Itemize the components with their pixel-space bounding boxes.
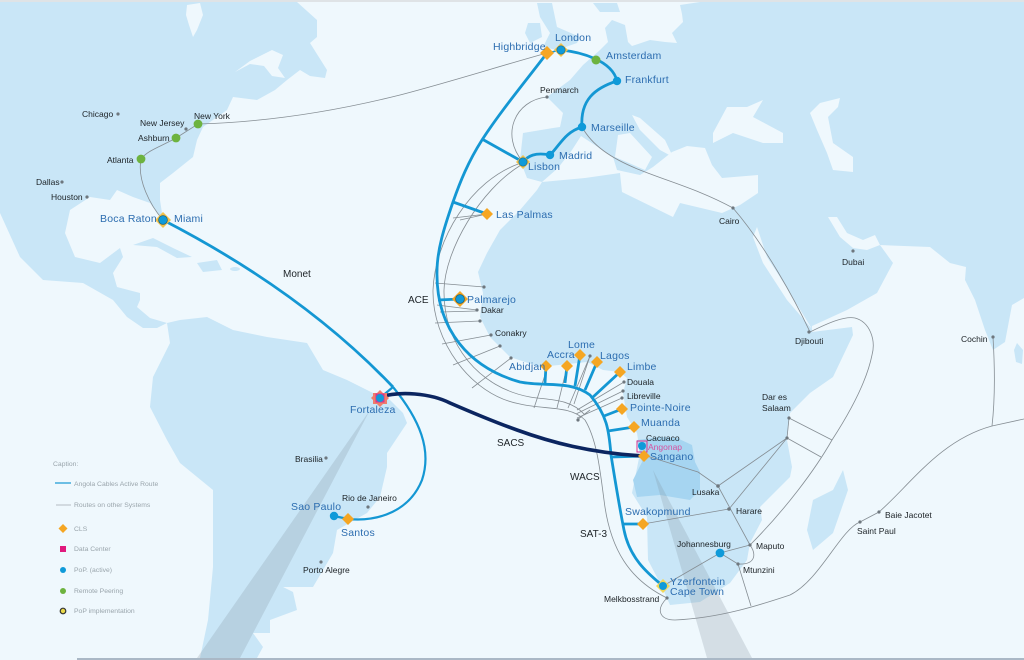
water: Red Sea [753, 227, 812, 329]
node: Johannesburg [677, 539, 731, 557]
land: Hispaniola [197, 260, 222, 272]
node: Atlanta [107, 155, 145, 165]
node: Frankfurt: Frankfurt [625, 74, 669, 86]
node: Yzerfontein and Cape Town: Cape Town [670, 586, 724, 598]
legend [53, 461, 158, 615]
node: Saint Paul: Saint Paul [857, 526, 896, 536]
node: Fortaleza [350, 390, 396, 416]
node: Palmarejo: Palmarejo [467, 294, 516, 306]
land: Scandinavia tip [593, 3, 620, 12]
node: Saint Paul [857, 520, 896, 536]
cable label: SACS: SACS [497, 438, 525, 449]
node: Santos [341, 513, 375, 539]
node: New York: New York [194, 111, 231, 121]
node: Muanda [628, 417, 680, 433]
node: Lome: Lome [568, 339, 595, 351]
legend title: Caption: [53, 461, 78, 468]
node: London: London [555, 32, 591, 44]
node: Chicago: Chicago [82, 109, 113, 119]
node: Maputo: Maputo [756, 541, 785, 551]
node: New York [194, 111, 231, 128]
node: Penmarch: Penmarch [540, 85, 579, 95]
legend: data center: Data Center [74, 546, 111, 553]
water: Mediterranean Sea [542, 136, 758, 217]
land: Ireland [525, 23, 542, 43]
node: Cacuaco and Angonap data center [637, 433, 682, 452]
projection wedge: Fortaleza [197, 410, 370, 658]
cable label: SAT-3: SAT-3 [580, 529, 607, 540]
node: Lisbon: Lisbon [528, 161, 560, 173]
routes on other systems [140, 53, 1024, 620]
node: Boca Raton and Miami [100, 212, 203, 228]
legend: remote peering: Remote Peering [74, 588, 123, 595]
land: Sri Lanka [1014, 343, 1023, 364]
node: Limbe [614, 361, 657, 378]
node: Amsterdam [592, 50, 662, 64]
node: Dubai [842, 249, 864, 267]
node: Madrid: Madrid [559, 150, 592, 162]
land: Puerto Rico [230, 267, 240, 271]
node: Boca Raton and Miami: Miami [174, 213, 203, 225]
land: South America [150, 317, 407, 658]
node: Mtunzini [736, 562, 775, 575]
node: Muanda: Muanda [641, 417, 680, 429]
legend: active route: Angola Cables Active Route [74, 481, 158, 488]
water: Hudson Bay [186, 3, 203, 37]
legend: other systems: Routes on other Systems [74, 502, 151, 509]
land: Cuba [133, 238, 192, 258]
node: Conakry: Conakry [495, 328, 527, 338]
node: Highbridge [493, 41, 554, 60]
land: Europe, Asia and Africa [478, 0, 1024, 605]
water: Gulf of Saint Lawrence [235, 50, 285, 78]
node: Cairo: Cairo [719, 216, 740, 226]
cable label: Monet: Monet [283, 269, 311, 280]
node: Highbridge: Highbridge [493, 41, 546, 53]
node: Santos: Santos [341, 527, 375, 539]
node: Dakar: Dakar [481, 305, 504, 315]
node: Accra: Accra [547, 349, 575, 361]
node: Dar es Salaam [762, 392, 791, 440]
node: Palmarejo [452, 291, 516, 307]
node: Marseille: Marseille [591, 122, 635, 134]
node: Sangano: Sangano [650, 451, 693, 463]
node: Dubai: Dubai [842, 257, 864, 267]
land: Great Britain [537, 3, 580, 50]
node: New Jersey: New Jersey [140, 118, 185, 128]
node: Johannesburg: Johannesburg [677, 539, 731, 549]
land: Angola highlight [633, 437, 700, 500]
water: Black Sea [713, 100, 783, 143]
node: Porto Alegre [303, 560, 350, 575]
cable label: ACE: ACE [408, 295, 429, 306]
node: Mtunzini: Mtunzini [743, 565, 775, 575]
node: Yzerfontein and Cape Town [656, 576, 725, 598]
land: Madagascar [807, 470, 848, 550]
water: Tyrrhenian Sea [615, 133, 652, 170]
node: Melkbosstrand: Melkbosstrand [604, 594, 660, 604]
water: Adriatic Sea [632, 115, 673, 157]
node: Cacuaco and Angonap data center: Angonap [648, 442, 682, 452]
SACS route [380, 394, 644, 456]
legend: CLS: CLS [74, 526, 88, 533]
node: Limbe: Limbe [627, 361, 657, 373]
node: West Africa unlabeled points [478, 285, 625, 422]
node: Cacuaco and Angonap data center: Cacuaco [646, 433, 680, 443]
node: Douala: Douala [627, 377, 654, 387]
node: Libreville: Libreville [627, 391, 661, 401]
node: Dar es Salaam: Salaam [762, 403, 791, 413]
node: Dallas: Dallas [36, 177, 60, 187]
node: Brasilia: Brasilia [295, 454, 323, 464]
node: Cairo [719, 206, 740, 226]
node: Houston: Houston [51, 192, 83, 202]
node: Fortaleza: Fortaleza [350, 404, 396, 416]
node: Porto Alegre: Porto Alegre [303, 565, 350, 575]
legend: PoP active: PoP. (active) [74, 567, 112, 574]
node: Lisbon [516, 155, 560, 173]
node: Yzerfontein and Cape Town: Yzerfontein [670, 576, 725, 588]
node: Pointe-Noire: Pointe-Noire [630, 402, 691, 414]
node: Lusaka: Lusaka [692, 487, 720, 497]
node: Harare: Harare [736, 506, 762, 516]
node: Amsterdam: Amsterdam [606, 50, 662, 62]
node: Lome [568, 339, 595, 361]
node: Djibouti [795, 330, 823, 346]
node: Sao Paulo: Sao Paulo [291, 501, 341, 513]
node: Djibouti: Djibouti [795, 336, 823, 346]
node: Swakopmund [625, 506, 691, 530]
active routes: Angola Cables [163, 50, 663, 586]
node: Boca Raton and Miami: Boca Raton [100, 213, 157, 225]
node: Baie Jacotet: Baie Jacotet [885, 510, 932, 520]
projection wedge: Sangano [653, 470, 752, 658]
node: Atlanta: Atlanta [107, 155, 134, 165]
cable label: WACS: WACS [570, 472, 600, 483]
legend: PoP implementation: PoP implementation [74, 608, 135, 615]
node: Ashburn: Ashburn [138, 133, 170, 143]
node: Las Palmas: Las Palmas [496, 209, 553, 221]
node: Accra [547, 349, 575, 372]
node: London [554, 32, 591, 57]
node: Swakopmund: Swakopmund [625, 506, 691, 518]
node: Sao Paulo [291, 501, 341, 520]
land: North and Central America [0, 0, 327, 328]
water: Caspian Sea [810, 98, 853, 172]
node: Cochin: Cochin [961, 334, 988, 344]
water: Persian Gulf [828, 217, 880, 250]
node: Rio de Janeiro [342, 493, 397, 509]
legend: CLS [58, 524, 88, 533]
node: Rio de Janeiro: Rio de Janeiro [342, 493, 397, 503]
node: Lagos: Lagos [600, 350, 630, 362]
node: Lagos [591, 350, 630, 368]
node: Abidjan: Abidjan [509, 361, 545, 373]
node: Dar es Salaam: Dar es [762, 392, 787, 402]
